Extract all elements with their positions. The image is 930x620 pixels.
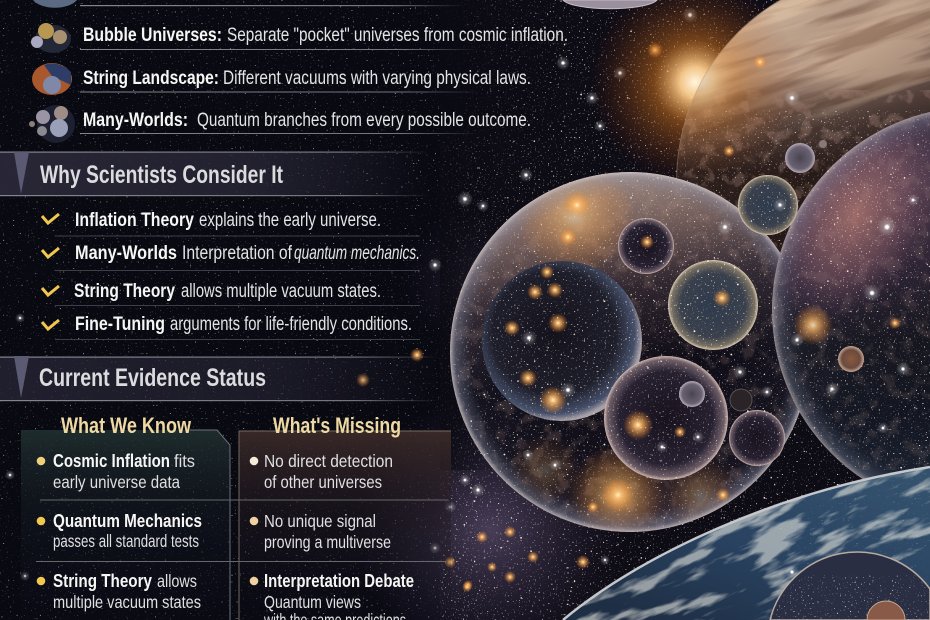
pink nebula planet — [772, 112, 930, 479]
item: Inflation Theory: explains the early universe. — [199, 210, 381, 231]
section heading: Why Scientists Consider It: Why Scientists Consider It — [40, 161, 284, 189]
item: String Theory: String Theory — [53, 571, 152, 591]
item: String Theory: String Theory — [74, 281, 175, 302]
item: Inflation Theory: Inflation Theory — [75, 210, 194, 231]
item: Interpretation Debate: Interpretation Debate — [264, 571, 414, 591]
list row: String Landscape: Different vacuums with varying physical laws. — [223, 68, 531, 89]
large transparent bubble universe — [450, 172, 800, 532]
panel: What We Know — [21, 413, 230, 620]
star sparkles — [5, 7, 698, 592]
item: String Theory: multiple vacuum states — [53, 592, 201, 612]
list row: Bubble Universes — [31, 23, 568, 53]
list row: Many-Worlds: Many-Worlds: — [83, 110, 188, 131]
sun glow — [590, 0, 800, 187]
inner bubbles — [480, 140, 864, 485]
top small planet — [563, 0, 657, 9]
icon: many-worlds — [29, 105, 75, 143]
item: Many-Worlds: Interpretation of — [182, 243, 293, 264]
item: Fine-Tuning: Fine-Tuning — [75, 314, 165, 335]
list row: Bubble Universes: Bubble Universes: — [83, 25, 222, 46]
item: Cosmic Inflation — [37, 451, 195, 492]
list row: Bubble Universes: Separate "pocket" universes from cosmic inflation. — [227, 25, 568, 46]
icon: bubble universes — [31, 23, 71, 53]
list row: Many-Worlds — [29, 105, 531, 143]
item: Quantum Mechanics: Quantum Mechanics — [53, 511, 202, 531]
list row: String Landscape — [32, 63, 531, 95]
item: Cosmic Inflation: Cosmic Inflation — [53, 451, 170, 471]
column heading: What We Know — [61, 413, 192, 438]
item: Quantum Mechanics: passes all standard tests — [53, 531, 199, 551]
item: No direct detection — [250, 451, 393, 492]
item: Fine-Tuning — [42, 314, 420, 340]
item: Fine-Tuning: arguments for life-friendly conditions. — [170, 314, 412, 335]
item: Interpretation Debate — [250, 571, 414, 620]
item: Many-Worlds — [42, 243, 420, 271]
banded giant planet — [676, 0, 930, 252]
item: No direct detection: No direct detection — [264, 451, 393, 471]
item: Many-Worlds: quantum mechanics. — [294, 243, 420, 264]
bright stars inside bubbles — [504, 191, 787, 513]
item: No unique signal: No unique signal — [264, 511, 376, 531]
item: Quantum Mechanics — [37, 511, 202, 551]
item: No unique signal: proving a multiverse — [264, 532, 391, 552]
section heading: Current Evidence Status — [0, 356, 440, 401]
item: Many-Worlds: Many-Worlds — [75, 243, 177, 264]
item: Inflation Theory — [42, 210, 420, 236]
bubble on blue planet — [770, 552, 930, 620]
item: String Theory — [37, 571, 201, 612]
item: String Theory — [42, 281, 420, 306]
item: Cosmic Inflation: fits — [174, 451, 195, 471]
list row: String Landscape: String Landscape: — [83, 68, 219, 89]
list row: Many-Worlds: Quantum branches from every possible outcome. — [197, 110, 531, 131]
section heading: Why Scientists Consider It — [0, 152, 430, 196]
panel: What's Missing — [239, 413, 451, 620]
item: No direct detection: of other universes — [264, 472, 382, 492]
blue cloud planet — [562, 466, 930, 620]
icon: top row planet — [33, 0, 77, 8]
item: String Theory: allows — [157, 571, 197, 591]
icon: string landscape — [32, 63, 72, 95]
item: Interpretation Debate: Quantum views — [264, 592, 361, 612]
item: String Theory: allows multiple vacuum states. — [181, 281, 381, 302]
section heading: Current Evidence Status: Current Evidence Status — [39, 364, 266, 392]
checklist: reasons — [42, 210, 420, 340]
item: Cosmic Inflation: early universe data — [53, 472, 180, 492]
column heading: What's Missing — [273, 413, 401, 438]
item: No unique signal — [250, 511, 391, 552]
